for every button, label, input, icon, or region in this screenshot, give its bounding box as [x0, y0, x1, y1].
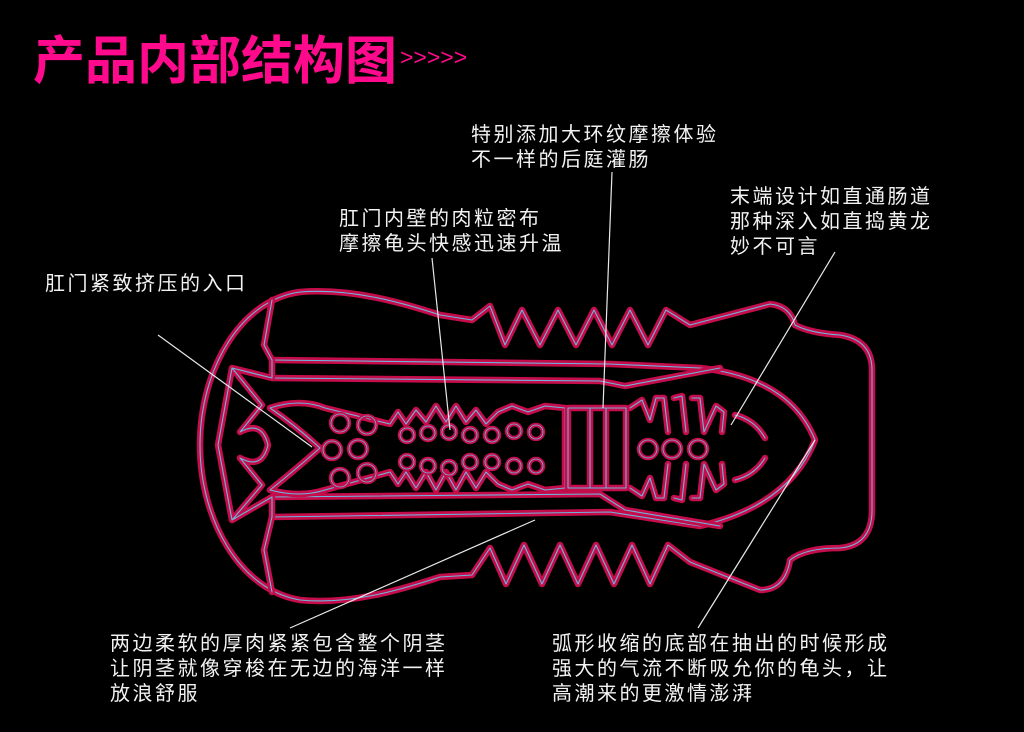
- title: 产品内部结构图: [33, 33, 397, 91]
- textured chamber: [270, 403, 565, 494]
- entrance cap: [218, 300, 272, 592]
- callout: end section: [730, 185, 932, 258]
- callout: side walls: [110, 632, 448, 705]
- callout: entrance: 肛门紧致挤压的入口: [45, 272, 248, 295]
- callout: side walls: 放浪舒服: [110, 682, 200, 705]
- callout: ring texture: 特别添加大环纹摩擦体验: [471, 123, 718, 146]
- callout: ring texture: 不一样的后庭灌肠: [471, 148, 651, 171]
- inner channels: [272, 360, 815, 526]
- callout: end section: 那种深入如直捣黄龙: [730, 210, 932, 233]
- callout: ring texture: [471, 123, 718, 171]
- raised ribs: [568, 408, 626, 488]
- callout: inner wall: [339, 207, 564, 255]
- callout: side walls: 让阴茎就像穿梭在无边的海洋一样: [110, 657, 448, 680]
- callout: suction: 高潮来的更激情澎湃: [552, 682, 754, 705]
- callout: end section: 末端设计如直通肠道: [730, 185, 932, 208]
- arrow: title chevrons: >>>>>: [400, 44, 467, 70]
- outer contour: [200, 291, 872, 601]
- callout: suction: [552, 632, 890, 705]
- leader lines: [158, 172, 835, 628]
- diagram: internal structure cross-section: [200, 291, 872, 601]
- callout: suction: 强大的气流不断吸允你的龟头，让: [552, 657, 890, 680]
- inner nubs: [323, 414, 707, 487]
- callout: side walls: 两边柔软的厚肉紧紧包含整个阴茎: [110, 632, 448, 655]
- callout: end section: 妙不可言: [730, 235, 820, 258]
- callout: inner wall: 肛门内壁的肉粒密布: [339, 207, 542, 230]
- tip chamber: [630, 396, 765, 500]
- callout: suction: 弧形收缩的底部在抽出的时候形成: [552, 632, 890, 655]
- callout: inner wall: 摩擦龟头快感迅速升温: [339, 232, 564, 255]
